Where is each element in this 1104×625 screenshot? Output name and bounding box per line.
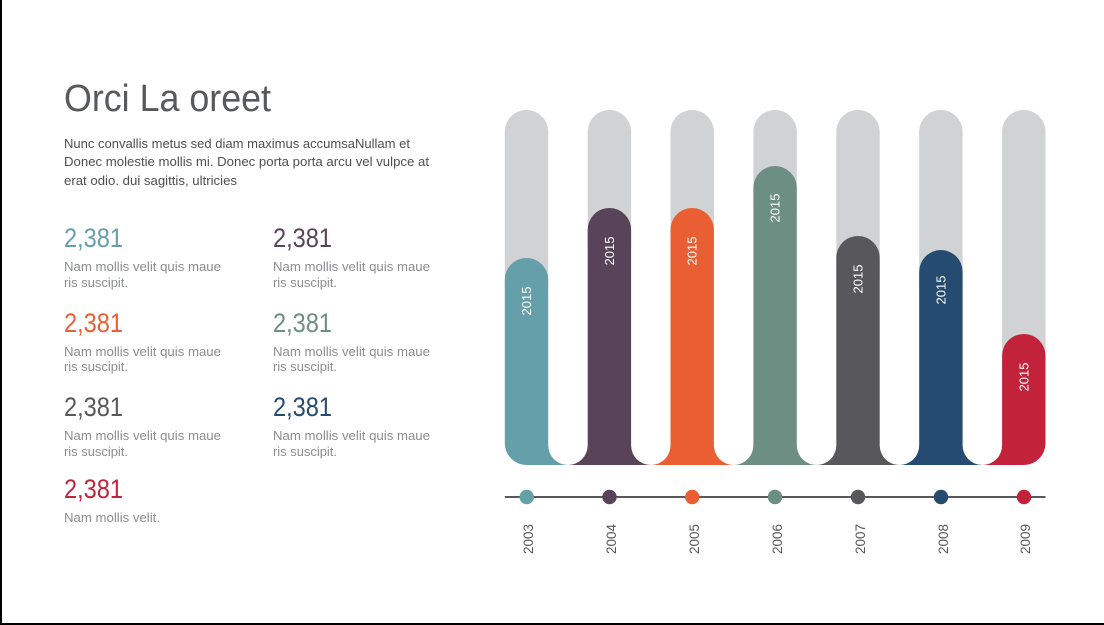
stat: teal (64, 223, 221, 290)
intro text (64, 136, 429, 188)
stat: orange: 2,381 (64, 308, 123, 338)
bar 2007 (817, 110, 899, 465)
stat: navy: Nam mollis velit quis maue (273, 428, 430, 443)
bar 2003: 2015 (519, 286, 534, 316)
timeline dot 2006 (768, 490, 782, 504)
stat: orange: Nam mollis velit quis maue (64, 344, 221, 359)
bar 2005 (651, 110, 734, 465)
stat: orange: ris suscipit. (64, 359, 128, 374)
stat: teal: Nam mollis velit quis maue (64, 259, 221, 274)
timeline dot 2003 (520, 490, 534, 504)
timeline dot 2005 (685, 490, 699, 504)
timeline (505, 490, 1046, 504)
title: Orci La oreet (64, 78, 271, 120)
year labels: 2008 (935, 524, 951, 554)
bar 2008: 2015 (933, 275, 948, 305)
stat: navy: 2,381 (273, 392, 332, 422)
stat: red: Nam mollis velit. (64, 510, 160, 525)
intro text: Donec molestie mollis mi. Donec porta porta arcu vel vulpce at (64, 154, 429, 169)
stat: green: 2,381 (273, 308, 332, 338)
stat: red (64, 474, 160, 525)
stat: green: ris suscipit. (273, 359, 337, 374)
bar 2007: 2015 (850, 264, 866, 294)
year labels: 2007 (852, 524, 868, 554)
bar 2004: 2015 (602, 236, 617, 266)
stat: purple (273, 223, 430, 290)
timeline dot 2008 (934, 490, 948, 504)
stat: purple: Nam mollis velit quis maue (273, 259, 430, 274)
stat: green: Nam mollis velit quis maue (273, 344, 430, 359)
stat: purple: 2,381 (273, 223, 332, 253)
stat: green (273, 308, 430, 374)
stat: red: 2,381 (64, 474, 123, 504)
stat: teal: 2,381 (64, 223, 123, 253)
intro text: erat odio. dui sagittis, ultricies (64, 173, 237, 188)
stat: grey (64, 392, 221, 459)
timeline dot 2004 (602, 490, 617, 504)
intro text: Nunc convallis metus sed diam maximus accumsaNullam et (64, 136, 410, 151)
stat: grey: 2,381 (64, 392, 123, 422)
bar 2006 (734, 110, 816, 465)
bar chart (505, 110, 1046, 465)
stat: navy (273, 392, 430, 459)
year labels (520, 524, 1033, 554)
timeline dot 2009 (1017, 490, 1031, 504)
year labels: 2009 (1017, 524, 1033, 554)
stat: navy: ris suscipit. (273, 444, 337, 459)
stat: teal: ris suscipit. (64, 275, 128, 290)
year labels: 2005 (686, 524, 702, 554)
bar 2006: 2015 (768, 193, 783, 223)
bar 2004 (568, 110, 651, 465)
stat: grey: Nam mollis velit quis maue (64, 428, 221, 443)
stat: orange (64, 308, 221, 374)
bar 2005: 2015 (685, 236, 700, 266)
bar 2003 (505, 110, 568, 465)
bar 2009 (982, 110, 1046, 465)
bar 2008 (900, 110, 982, 465)
year labels: 2003 (520, 524, 536, 554)
bar 2009: 2015 (1016, 362, 1031, 392)
year labels: 2006 (769, 524, 785, 554)
timeline dot 2007 (851, 490, 865, 504)
stat: purple: ris suscipit. (273, 275, 337, 290)
year labels: 2004 (603, 524, 619, 554)
stat: grey: ris suscipit. (64, 444, 128, 459)
